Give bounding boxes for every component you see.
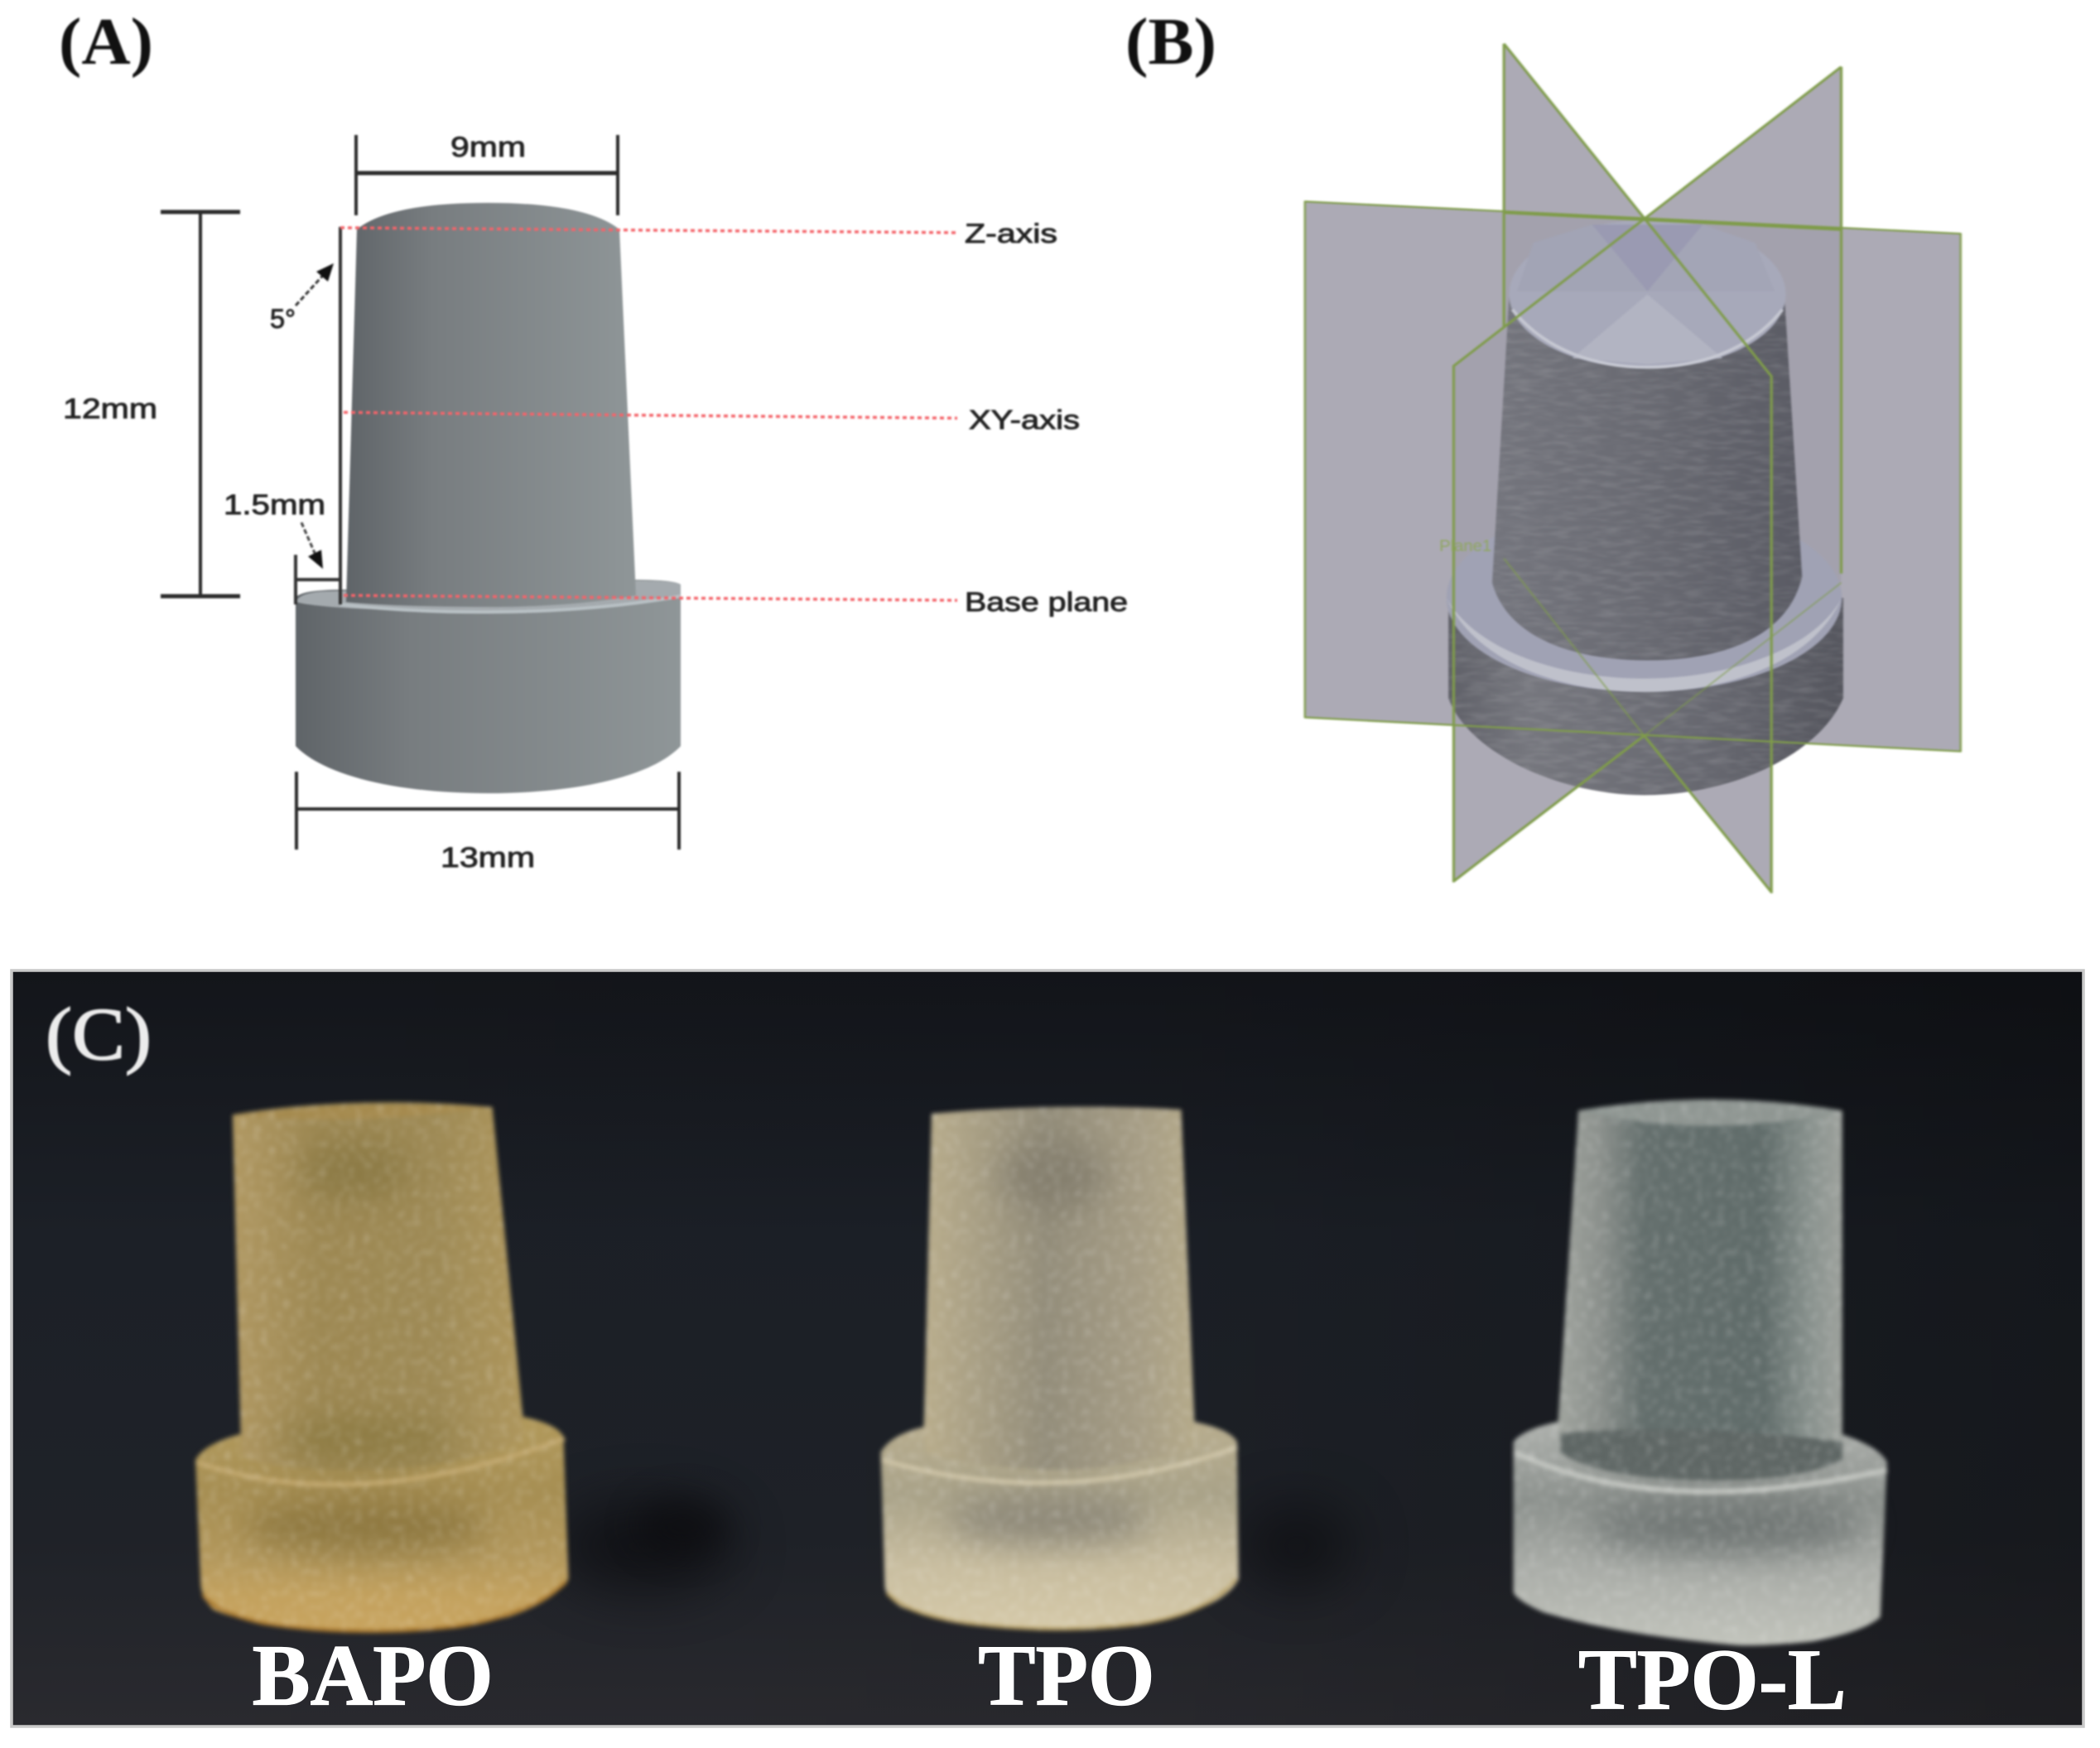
specimen: TPO-L xyxy=(1514,1100,1887,1727)
specimen: BAPO xyxy=(195,1102,731,1723)
specimen: TPO xyxy=(637,1106,1353,1723)
Base plane reference line and label xyxy=(344,587,1128,617)
green plane outlines xyxy=(1305,44,1961,893)
XY-axis reference line and label: XY-axis xyxy=(969,405,1080,435)
13mm base dimension xyxy=(296,772,679,874)
small plane tag: Plane1 xyxy=(1439,537,1491,555)
XY-axis reference line and label xyxy=(344,405,1080,435)
9mm width dimension xyxy=(356,132,618,215)
Z-axis reference line and label xyxy=(340,219,1057,248)
1.5mm flange dimension xyxy=(224,489,340,604)
5 degree draft angle annotation xyxy=(270,227,340,604)
label: TPO: TPO xyxy=(978,1626,1155,1723)
9mm width dimension: 9mm xyxy=(450,132,526,163)
photo background xyxy=(12,970,2083,1726)
panel B: 3D scan with three reference planes xyxy=(1305,44,1961,893)
panel A: dimensioned specimen drawing xyxy=(59,6,1128,874)
5 degree draft angle annotation: 5° xyxy=(270,304,296,334)
specimen model xyxy=(296,203,681,793)
reference plane fills xyxy=(1305,44,1961,893)
panel label A: (A) xyxy=(59,6,153,79)
label: TPO-L: TPO-L xyxy=(1578,1630,1847,1727)
label: BAPO: BAPO xyxy=(253,1626,494,1723)
1.5mm flange dimension: 1.5mm xyxy=(224,489,325,521)
Z-axis reference line and label: Z-axis xyxy=(965,219,1057,248)
panel label B: (B) xyxy=(1125,6,1216,79)
12mm height dimension: 12mm xyxy=(63,393,157,425)
12mm height dimension xyxy=(63,212,240,596)
13mm base dimension: 13mm xyxy=(441,842,535,874)
panel label C: (C) xyxy=(46,994,152,1076)
scanned specimen xyxy=(1447,220,1843,795)
panel C: photo of printed specimens xyxy=(12,970,2083,1727)
Base plane reference line and label: Base plane xyxy=(965,587,1128,617)
